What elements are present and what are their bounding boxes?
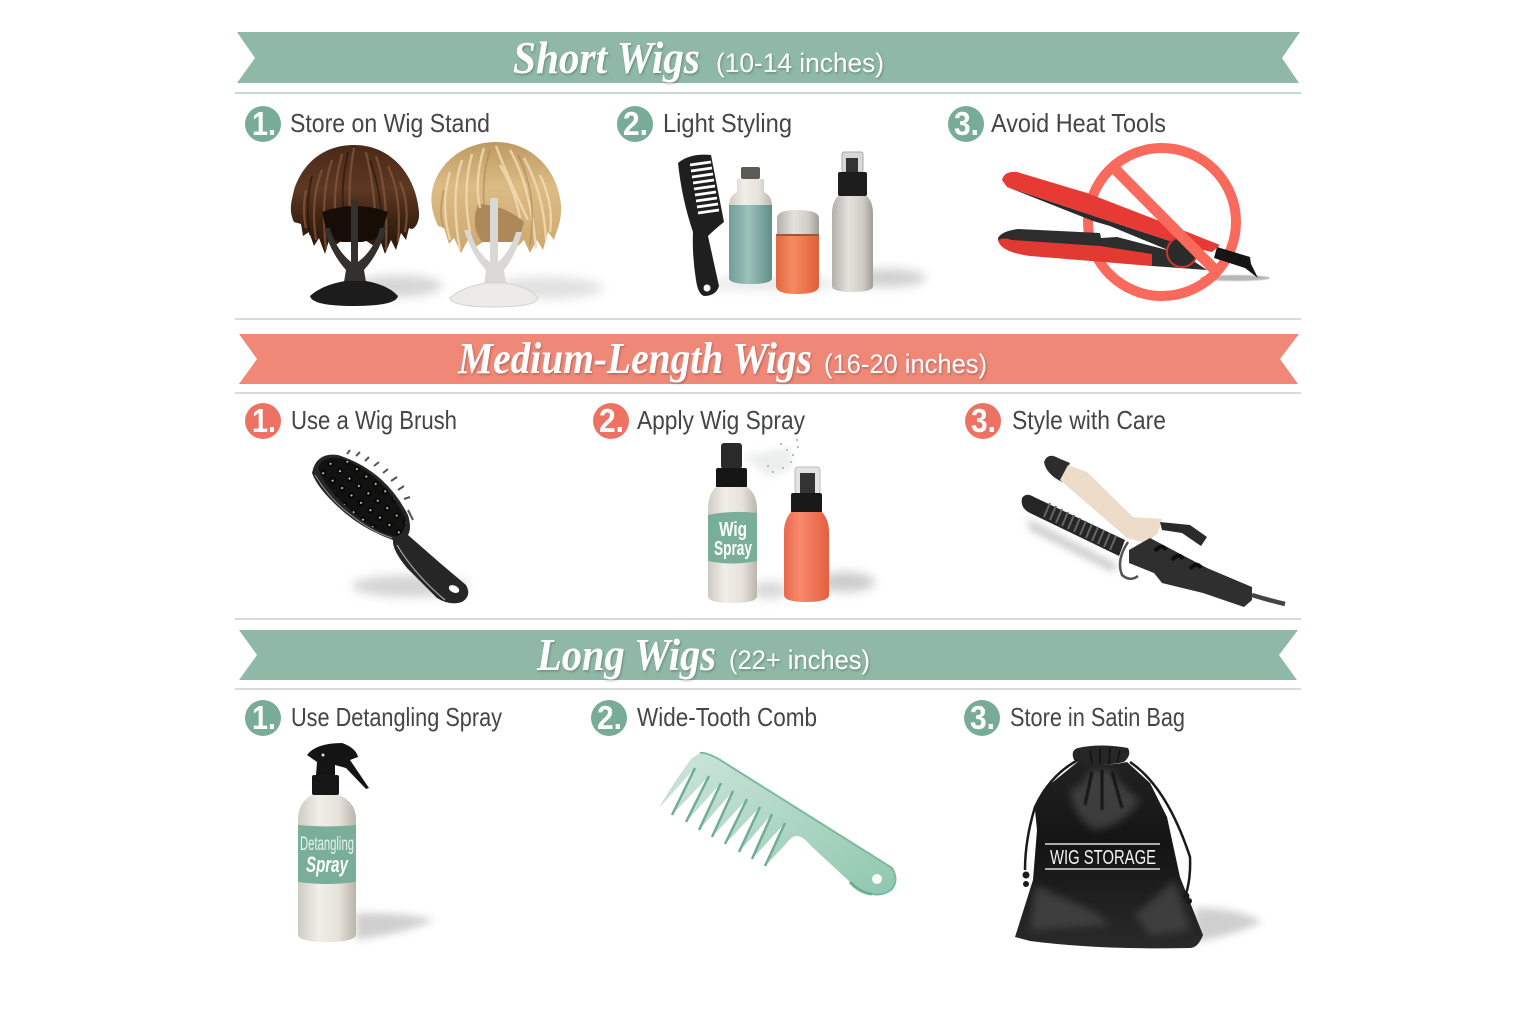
- banner: long wigs: [239, 629, 1298, 680]
- icon: wig spray bottles: Wig: [719, 519, 747, 541]
- icon: black satin storage bag: WIG STORAGE: [1050, 847, 1156, 869]
- icon: wig spray bottles: Spray: [714, 538, 753, 560]
- step: wide-tooth comb: Wide-Tooth Comb: [637, 702, 817, 732]
- step: use a wig brush: 1.: [252, 402, 276, 439]
- icon: black satin storage bag: [1015, 746, 1262, 948]
- banner: medium-length wigs: Medium-Length Wigs: [457, 334, 812, 383]
- step: avoid heat tools: [948, 105, 1166, 142]
- step: store on wig stand: 1.: [252, 105, 276, 142]
- step: wide-tooth comb: 2.: [597, 699, 622, 736]
- step: avoid heat tools: Avoid Heat Tools: [991, 108, 1166, 138]
- panel: long wigs: [235, 629, 1301, 948]
- icon: wide-tooth comb: [659, 753, 896, 894]
- step: store on wig stand: [245, 105, 490, 142]
- banner: medium-length wigs: [239, 334, 1299, 384]
- icon: wig spray bottles: [708, 440, 875, 603]
- icon: detangling spray bottle: Spray: [306, 852, 349, 877]
- step: use a wig brush: [245, 402, 457, 439]
- step: apply wig spray: 2.: [599, 402, 624, 439]
- step: light styling: [617, 105, 792, 142]
- step: use detangling spray: 1.: [252, 699, 276, 736]
- step: use detangling spray: [245, 699, 502, 736]
- banner: long wigs: Long Wigs: [536, 629, 716, 680]
- icon: comb and styling bottles: [678, 152, 926, 296]
- step: store in satin bag: Store in Satin Bag: [1010, 702, 1185, 732]
- banner: medium-length wigs: (16-20 inches): [824, 349, 987, 379]
- icon: brown and blonde wigs on stands: [291, 142, 603, 307]
- step: use a wig brush: Use a Wig Brush: [291, 405, 457, 435]
- step: use detangling spray: Use Detangling Spray: [291, 702, 502, 732]
- step: wide-tooth comb: [591, 699, 817, 736]
- step: style with care: [965, 402, 1166, 439]
- panel: short wigs: [235, 32, 1301, 319]
- step: avoid heat tools: 3.: [954, 105, 979, 142]
- step: apply wig spray: Apply Wig Spray: [637, 405, 805, 435]
- icon: detangling spray bottle: Detangling: [300, 834, 354, 855]
- banner: short wigs: Short Wigs: [513, 32, 700, 83]
- step: store in satin bag: 3.: [970, 699, 995, 736]
- icon: paddle wig brush: [312, 450, 468, 603]
- icon: flat iron with prohibition sign: [998, 148, 1270, 296]
- banner: short wigs: [237, 32, 1300, 83]
- icon: curling iron: [1022, 456, 1285, 607]
- step: light styling: Light Styling: [663, 108, 792, 138]
- step: store in satin bag: [964, 699, 1185, 736]
- banner: long wigs: (22+ inches): [729, 645, 870, 675]
- step: style with care: 3.: [971, 402, 996, 439]
- banner: short wigs: (10-14 inches): [716, 48, 884, 78]
- icon: detangling spray bottle: [298, 743, 434, 942]
- step: apply wig spray: [593, 402, 805, 439]
- step: store on wig stand: Store on Wig Stand: [290, 108, 490, 138]
- step: style with care: Style with Care: [1012, 405, 1166, 435]
- panel: medium-length wigs: [235, 334, 1301, 619]
- step: light styling: 2.: [623, 105, 648, 142]
